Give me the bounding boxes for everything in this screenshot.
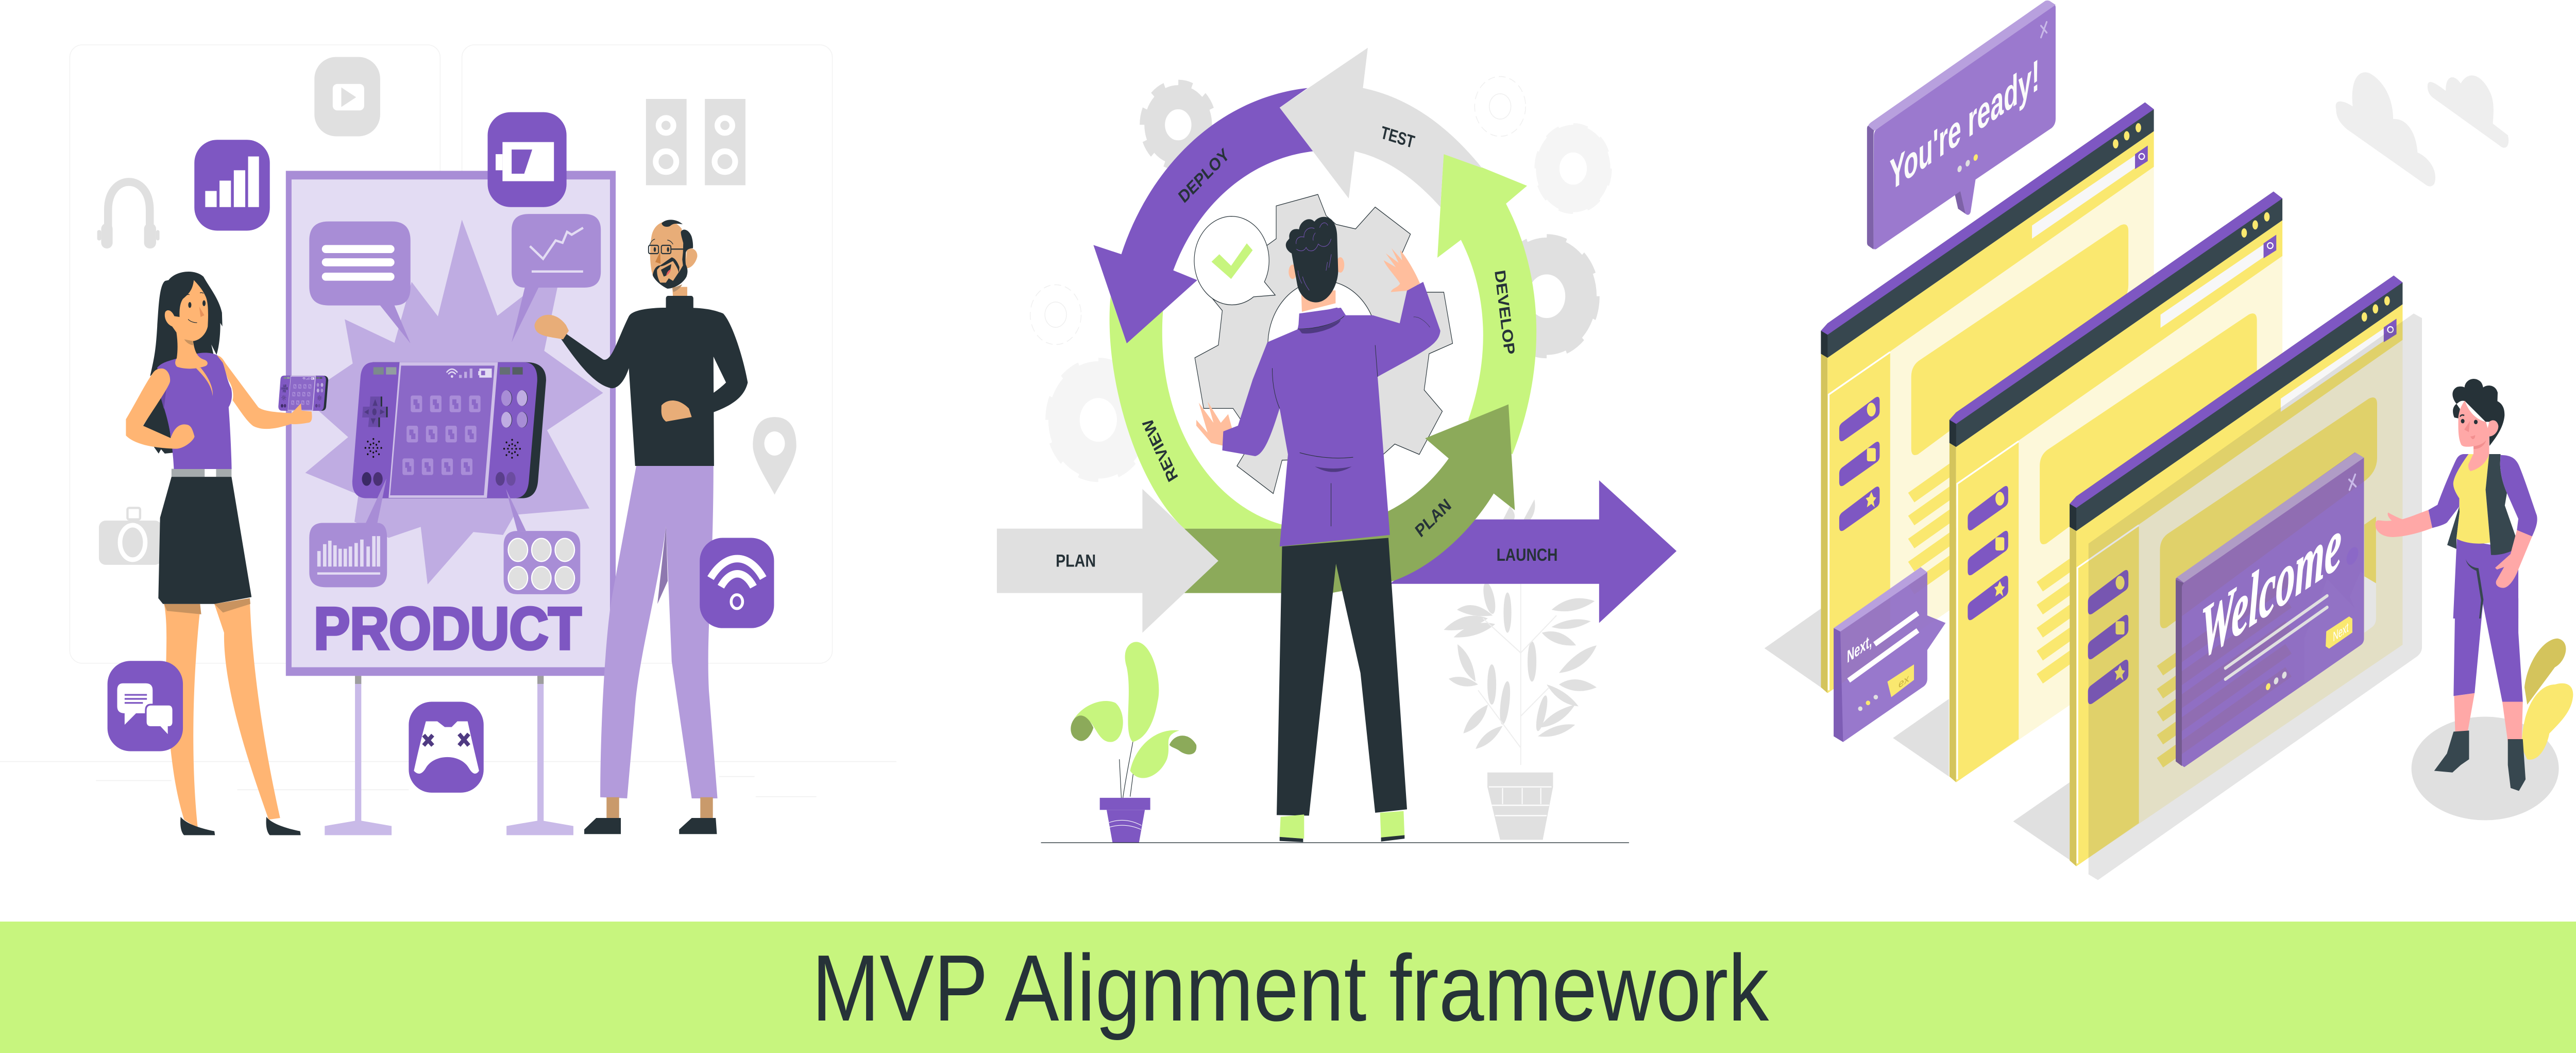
icon: signal bars [194,140,270,231]
card: Welcome [2176,453,2364,767]
icon: wifi [700,538,774,628]
arrow: REVIEW [1110,296,1282,529]
large gear [1195,194,1452,494]
illustration: onboarding screens [1765,1,2573,880]
man: head [649,220,697,311]
icon: speakers [646,99,745,185]
starburst [303,220,603,584]
illustration: product presentation [0,45,896,835]
product board [286,171,616,835]
arrow labels: DEVELOP [1492,269,1518,356]
background gears [1030,76,1607,475]
title: MVP Alignment framework [812,935,1769,1041]
arrow: TEST [1280,48,1482,207]
arrow: PLAN straight [1184,529,1282,593]
person: man [534,220,748,834]
callout: bar chart [309,479,387,587]
window image block [2364,516,2376,633]
icon: location pin [753,417,796,495]
arrow labels: TEST [1379,122,1417,152]
product device [352,362,546,498]
guide: upper body [2376,379,2537,619]
browser window: middle [1950,192,2282,782]
icon: game controller [409,702,484,793]
card: Welcome: Welcome [2200,499,2342,676]
gear hole [1268,281,1378,410]
icon: battery [487,112,567,207]
clouds [2336,72,2509,187]
background panels [0,45,896,797]
icon: chat [108,661,183,751]
ground line [1041,842,1629,843]
arrow labels: REVIEW [1139,415,1181,485]
person: woman guide [2376,379,2573,820]
arrow labels: PLAN [1056,550,1096,571]
callout: check mark [1194,216,1275,305]
heading: PRODUCT: PRODUCT [314,596,581,662]
icon: camera [99,508,162,565]
arrow: DEPLOY [1093,88,1313,343]
arrow: LAUNCH [1390,480,1676,623]
arrow: PLAN grey [997,489,1218,633]
callout: line chart [512,214,601,342]
title banner [0,922,2576,1053]
callout tails over device [366,479,526,531]
callout: Next: Next, [1847,630,1872,667]
arrow labels [1056,122,1557,571]
woman: upper body [126,272,328,469]
floor shadows [1765,609,2070,860]
plant: grey [1444,499,1597,840]
arrow labels: PLAN [1412,495,1454,541]
callout: You're ready [1867,1,2056,249]
browser window: back [1821,103,2154,693]
callout: Next: ex [1899,672,1909,691]
person: woman [126,272,328,835]
icon: video play [314,57,380,136]
head and raised hand [1286,217,1430,333]
callout: Next [1834,567,1945,742]
window overlay [2089,313,2422,880]
person: from behind [1196,217,1440,842]
card: Welcome: Next [2333,620,2349,645]
handheld device [278,376,328,411]
plant: potted green [1071,642,1196,843]
callout: text lines [309,222,411,343]
callout: people [504,489,580,594]
callout: You're ready: You're ready! [1889,49,2040,202]
arrow labels: DEPLOY [1175,144,1232,207]
arrow: PLAN ring [1282,405,1515,593]
arrow: DEVELOP [1437,152,1536,455]
illustration: agile cycle [997,48,1676,843]
browser window: front [2070,276,2402,866]
arrow labels: LAUNCH [1497,545,1557,565]
icon: headphones [97,182,160,248]
